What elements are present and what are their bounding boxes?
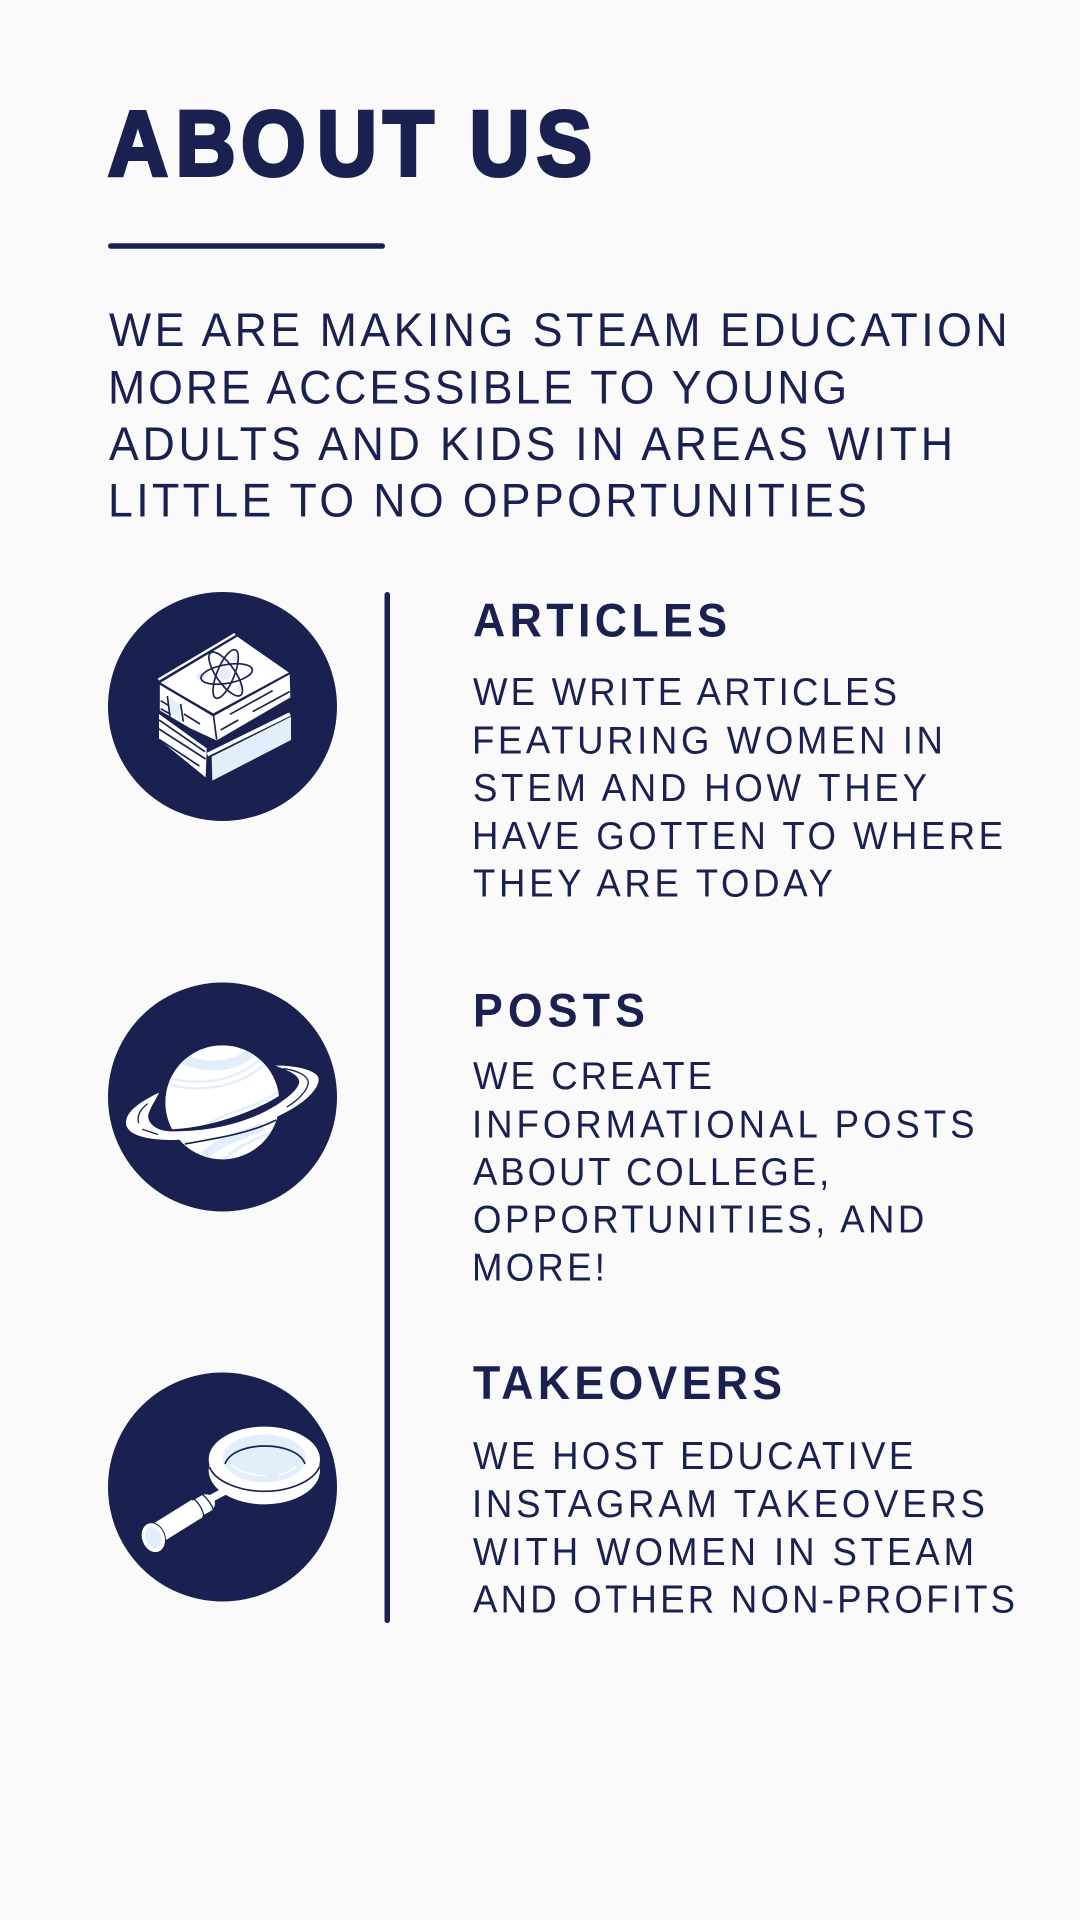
- text: articles description: THEY ARE TODAY: [473, 862, 833, 905]
- text: posts description: INFORMATIONAL POSTS: [472, 1102, 975, 1146]
- text: articles description: STEM AND HOW THEY: [473, 766, 927, 809]
- text: takeovers description: WITH WOMEN IN STEAM: [473, 1530, 974, 1573]
- text: takeovers description: [472, 1434, 1015, 1621]
- heading: articles: ARTICLES: [473, 595, 727, 647]
- icon: ringed planet: [108, 982, 337, 1212]
- heading: posts: POSTS: [473, 985, 645, 1037]
- text: articles description: FEATURING WOMEN IN: [472, 718, 943, 762]
- intro text block: LITTLE TO NO OPPORTUNITIES: [108, 475, 867, 527]
- text: takeovers description: AND OTHER NON-PROFITS: [473, 1578, 1015, 1621]
- icon: magnifying glass: [108, 1372, 337, 1602]
- text: posts description: WE CREATE: [473, 1054, 712, 1097]
- text: articles description: HAVE GOTTEN TO WHERE: [472, 814, 1003, 857]
- text: posts description: MORE!: [472, 1245, 605, 1289]
- text: posts description: OPPORTUNITIES, AND: [473, 1198, 924, 1241]
- text: takeovers description: WE HOST EDUCATIVE: [473, 1434, 913, 1477]
- text: posts description: ABOUT COLLEGE,: [473, 1150, 829, 1193]
- vertical divider: [384, 592, 390, 1623]
- text: articles description: WE WRITE ARTICLES: [473, 670, 897, 713]
- icon: stacked science books: [108, 592, 337, 821]
- heading: takeovers: TAKEOVERS: [473, 1357, 782, 1409]
- title: ABOUT US: [108, 92, 592, 195]
- title underline: [108, 243, 385, 249]
- text: posts description: [472, 1054, 975, 1289]
- intro text block: MORE ACCESSIBLE TO YOUNG: [108, 361, 847, 414]
- intro text block: [108, 304, 1008, 527]
- text: articles description: [472, 670, 1003, 905]
- intro text block: ADULTS AND KIDS IN AREAS WITH: [109, 418, 953, 470]
- intro text block: WE ARE MAKING STEAM EDUCATION: [109, 304, 1008, 356]
- text: takeovers description: INSTAGRAM TAKEOVERS: [472, 1482, 985, 1525]
